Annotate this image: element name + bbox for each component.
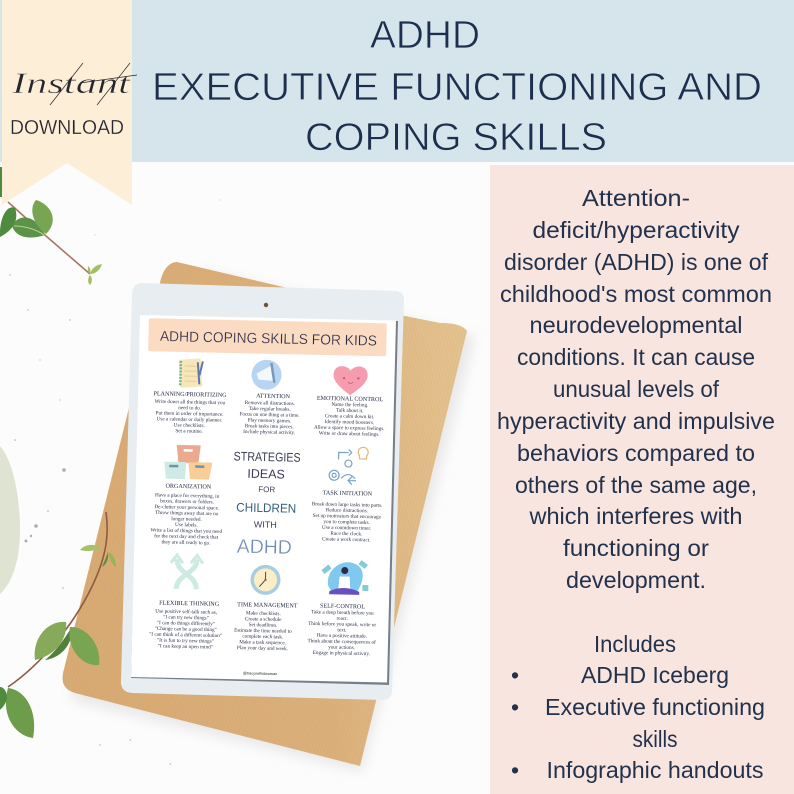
pumpkin at left edge xyxy=(0,446,20,594)
icon: megaphone in circle xyxy=(251,359,282,390)
block: time management: complete each task. xyxy=(242,634,283,640)
panel text: ADHD description and includes list: Includes xyxy=(594,631,676,657)
block: self-control: Engage in physical activity. xyxy=(313,650,370,657)
block: flexible thinking: "Change can be a good thing" xyxy=(155,626,217,633)
block: emotional control: EMOTIONAL CONTROL xyxy=(317,396,383,403)
screen shadow xyxy=(131,316,398,685)
icon: notebook xyxy=(178,358,203,388)
block: flexible thinking: "I can try new things" xyxy=(163,614,209,621)
block: organization: Write a list of things that you need xyxy=(150,526,223,535)
panel text: ADHD description and includes list: childhood's most common xyxy=(500,281,772,307)
centre heading: strategies ideas for children with ADHD: STRATEGIES xyxy=(233,449,301,465)
block: attention: Remove all distractions. xyxy=(245,400,295,407)
block: flexible thinking: "It is fun to try new things" xyxy=(157,637,214,645)
block: planning: Put them in order of importance. xyxy=(156,409,224,418)
DOWNLOAD label: DOWNLOAD xyxy=(10,117,124,139)
icon: self-control meditating figure xyxy=(321,559,369,595)
panel text: ADHD description and includes list: deficit/hyperactivity xyxy=(532,217,740,243)
page title band: ADHD COPING SKILLS FOR KIDS xyxy=(160,329,377,350)
block: emotional control: Create a calm down kit. xyxy=(325,413,374,420)
header band xyxy=(0,0,794,162)
block: time management xyxy=(234,602,298,652)
block: self-control: Think before you speak, write or xyxy=(308,620,376,628)
block: attention: Take regular breaks. xyxy=(249,406,291,413)
block: task initiation: Race the clock. xyxy=(330,531,362,537)
block: task initiation: TASK INITIATION xyxy=(323,491,373,498)
block: self-control: Take a deep breath before you xyxy=(311,608,374,617)
tablet camera xyxy=(264,303,268,307)
block: attention: ATTENTION xyxy=(256,394,291,400)
panel text: ADHD description and includes list: Attention- xyxy=(582,185,690,211)
block: self-control xyxy=(307,603,377,657)
block: task initiation: Reduce distractions. xyxy=(326,507,368,514)
main title: ADHD xyxy=(370,14,480,57)
block: task initiation: Create a work contract. xyxy=(322,536,370,543)
block: organization: they are all ready to go. xyxy=(161,539,211,546)
script: Instant: Instant xyxy=(11,67,131,100)
centre heading: strategies ideas for children with ADHD: ADHD xyxy=(237,536,292,559)
block: attention xyxy=(239,393,300,436)
block: planning: Use checklists. xyxy=(174,422,205,429)
block: emotional control: Name the feeling. xyxy=(331,401,368,409)
block: flexible thinking: FLEXIBLE THINKING xyxy=(159,601,220,608)
main title xyxy=(152,14,762,159)
block: organization: boxes, drawers or folders. xyxy=(160,497,214,505)
panel text: ADHD description and includes list: others of the same age, xyxy=(515,472,757,498)
icon: flexible thinking helix xyxy=(170,555,203,589)
plant: bottom-left vine xyxy=(0,512,116,738)
panel text: ADHD description and includes list: ADHD Iceberg xyxy=(581,662,729,688)
block: attention: Play memory games. xyxy=(248,417,291,424)
block: attention: Focus on one thing at a time. xyxy=(239,412,300,419)
icon: clock xyxy=(250,565,281,595)
panel text: ADHD description and includes list: development. xyxy=(566,567,706,593)
block: organization: Have a place for everything, in xyxy=(155,491,220,500)
main title: COPING SKILLS xyxy=(305,116,607,159)
block: planning: PLANNING/PRIORITIZING xyxy=(153,391,227,399)
centre heading: strategies ideas for children with ADHD: CHILDREN xyxy=(236,500,296,516)
block: organization xyxy=(150,483,224,547)
block: flexible thinking: "I can keep an open mind" xyxy=(158,643,213,651)
centre heading: strategies ideas for children with ADHD: WITH xyxy=(254,519,277,530)
block: emotional control: Talk about it. xyxy=(336,408,364,414)
instant download ribbon xyxy=(2,0,137,205)
block: flexible thinking: Use positive self-talk such as, xyxy=(155,607,217,616)
block: organization: Throw things away that are no xyxy=(155,510,219,517)
block: organization: Use labels. xyxy=(175,522,198,529)
block: task initiation: you to complete tasks. xyxy=(323,519,370,526)
speckles on background xyxy=(9,200,220,765)
panel text: ADHD description and includes list: unusual levels of xyxy=(553,376,720,402)
block: task initiation: Set up motivators that encourage xyxy=(313,513,382,520)
panel text: ADHD description and includes list: skills xyxy=(632,726,678,752)
block: flexible thinking: "I can think of a different solution" xyxy=(149,631,222,639)
block: time management: Create a schedule xyxy=(245,616,282,623)
panel text: ADHD description and includes list: which interferes with xyxy=(528,503,742,529)
panel text: ADHD description and includes list: Executive functioning xyxy=(545,694,765,720)
block: organization: ORGANIZATION xyxy=(165,484,212,491)
panel text: ADHD description and includes list: hyperactivity and impulsive xyxy=(497,408,775,434)
block: flexible thinking: "I can do things differently" xyxy=(157,619,215,627)
block: attention: Include physical activity. xyxy=(243,429,295,436)
panel text: ADHD description and includes list: functioning or xyxy=(563,535,709,561)
block: time management: TIME MANAGEMENT xyxy=(237,602,298,610)
block: self-control: your actions. xyxy=(328,645,355,651)
block: planning: Write down all the things that you xyxy=(154,399,226,406)
block: attention: Break tasks into pieces. xyxy=(245,423,294,430)
icon: heart xyxy=(333,366,368,396)
centre heading: strategies ideas for children with ADHD: IDEAS xyxy=(247,467,285,482)
block: self-control: Think about the consequences of xyxy=(307,637,376,646)
page title band xyxy=(148,318,387,356)
printed page on tablet screen xyxy=(131,315,396,683)
block: emotional control xyxy=(314,396,385,438)
panel text: ADHD description and includes list: • xyxy=(511,757,519,783)
block: time management: Plan your day and week. xyxy=(237,645,288,652)
centre heading: strategies ideas for children with ADHD xyxy=(231,449,301,559)
block: time management: Set deadlines. xyxy=(249,622,278,629)
block: emotional control: Allow a space to express feelings. xyxy=(314,424,385,432)
panel text: ADHD description and includes list: disorder (ADHD) is one of xyxy=(504,249,769,275)
block: organization: De-clutter your personal space. xyxy=(154,504,219,512)
panel text: ADHD description and includes list: neurodevelopmental xyxy=(530,312,742,338)
plant: top-left vine xyxy=(0,167,102,285)
main title: EXECUTIVE FUNCTIONING AND xyxy=(152,66,762,109)
block: planning xyxy=(152,391,227,435)
block: emotional control: Identify mood boosters. xyxy=(325,418,374,426)
block: time management: Estimate the time needed to xyxy=(234,628,292,635)
icon: storage boxes xyxy=(164,445,213,480)
block: planning: Use a calendar or daily planner. xyxy=(157,416,222,424)
block: organization: for the next day and check that xyxy=(154,532,219,541)
page handle: @tracynelliotwoman xyxy=(243,671,277,676)
centre heading: strategies ideas for children with ADHD: FOR xyxy=(258,485,276,494)
script: Instant xyxy=(11,63,137,105)
block: task initiation: Break down large tasks into parts. xyxy=(312,501,382,509)
panel text: ADHD description and includes list: conditions. It can cause xyxy=(517,344,755,370)
pink text panel xyxy=(490,165,794,794)
block: organization: longer needed. xyxy=(171,516,202,523)
block: self-control: text. xyxy=(337,627,347,634)
block: emotional control: Write or draw about feelings. xyxy=(319,430,380,438)
block: self-control: Have a positive attitude. xyxy=(317,633,367,640)
block: time management: Make checklists. xyxy=(246,610,281,617)
background: white surface xyxy=(0,160,794,794)
block: self-control: SELF-CONTROL xyxy=(320,604,365,611)
panel text: ADHD description and includes list xyxy=(497,185,775,783)
block: planning: need to do. xyxy=(178,405,201,412)
block: time management: Make a task sequence. xyxy=(239,639,286,646)
tablet xyxy=(121,283,404,700)
block: task initiation: Use a countdown timer. xyxy=(322,525,371,532)
panel text: ADHD description and includes list: • xyxy=(511,662,519,688)
panel text: ADHD description and includes list: Infographic handouts xyxy=(546,757,764,783)
block: task initiation xyxy=(311,490,383,544)
icon: task initiation xyxy=(329,447,368,485)
panel text: ADHD description and includes list: behaviors compared to xyxy=(517,440,755,466)
block: planning: Set a routine. xyxy=(175,428,203,435)
wooden board xyxy=(63,262,475,772)
panel text: ADHD description and includes list: • xyxy=(511,694,519,720)
block: self-control: react. xyxy=(337,616,348,622)
block: flexible thinking xyxy=(149,600,223,651)
